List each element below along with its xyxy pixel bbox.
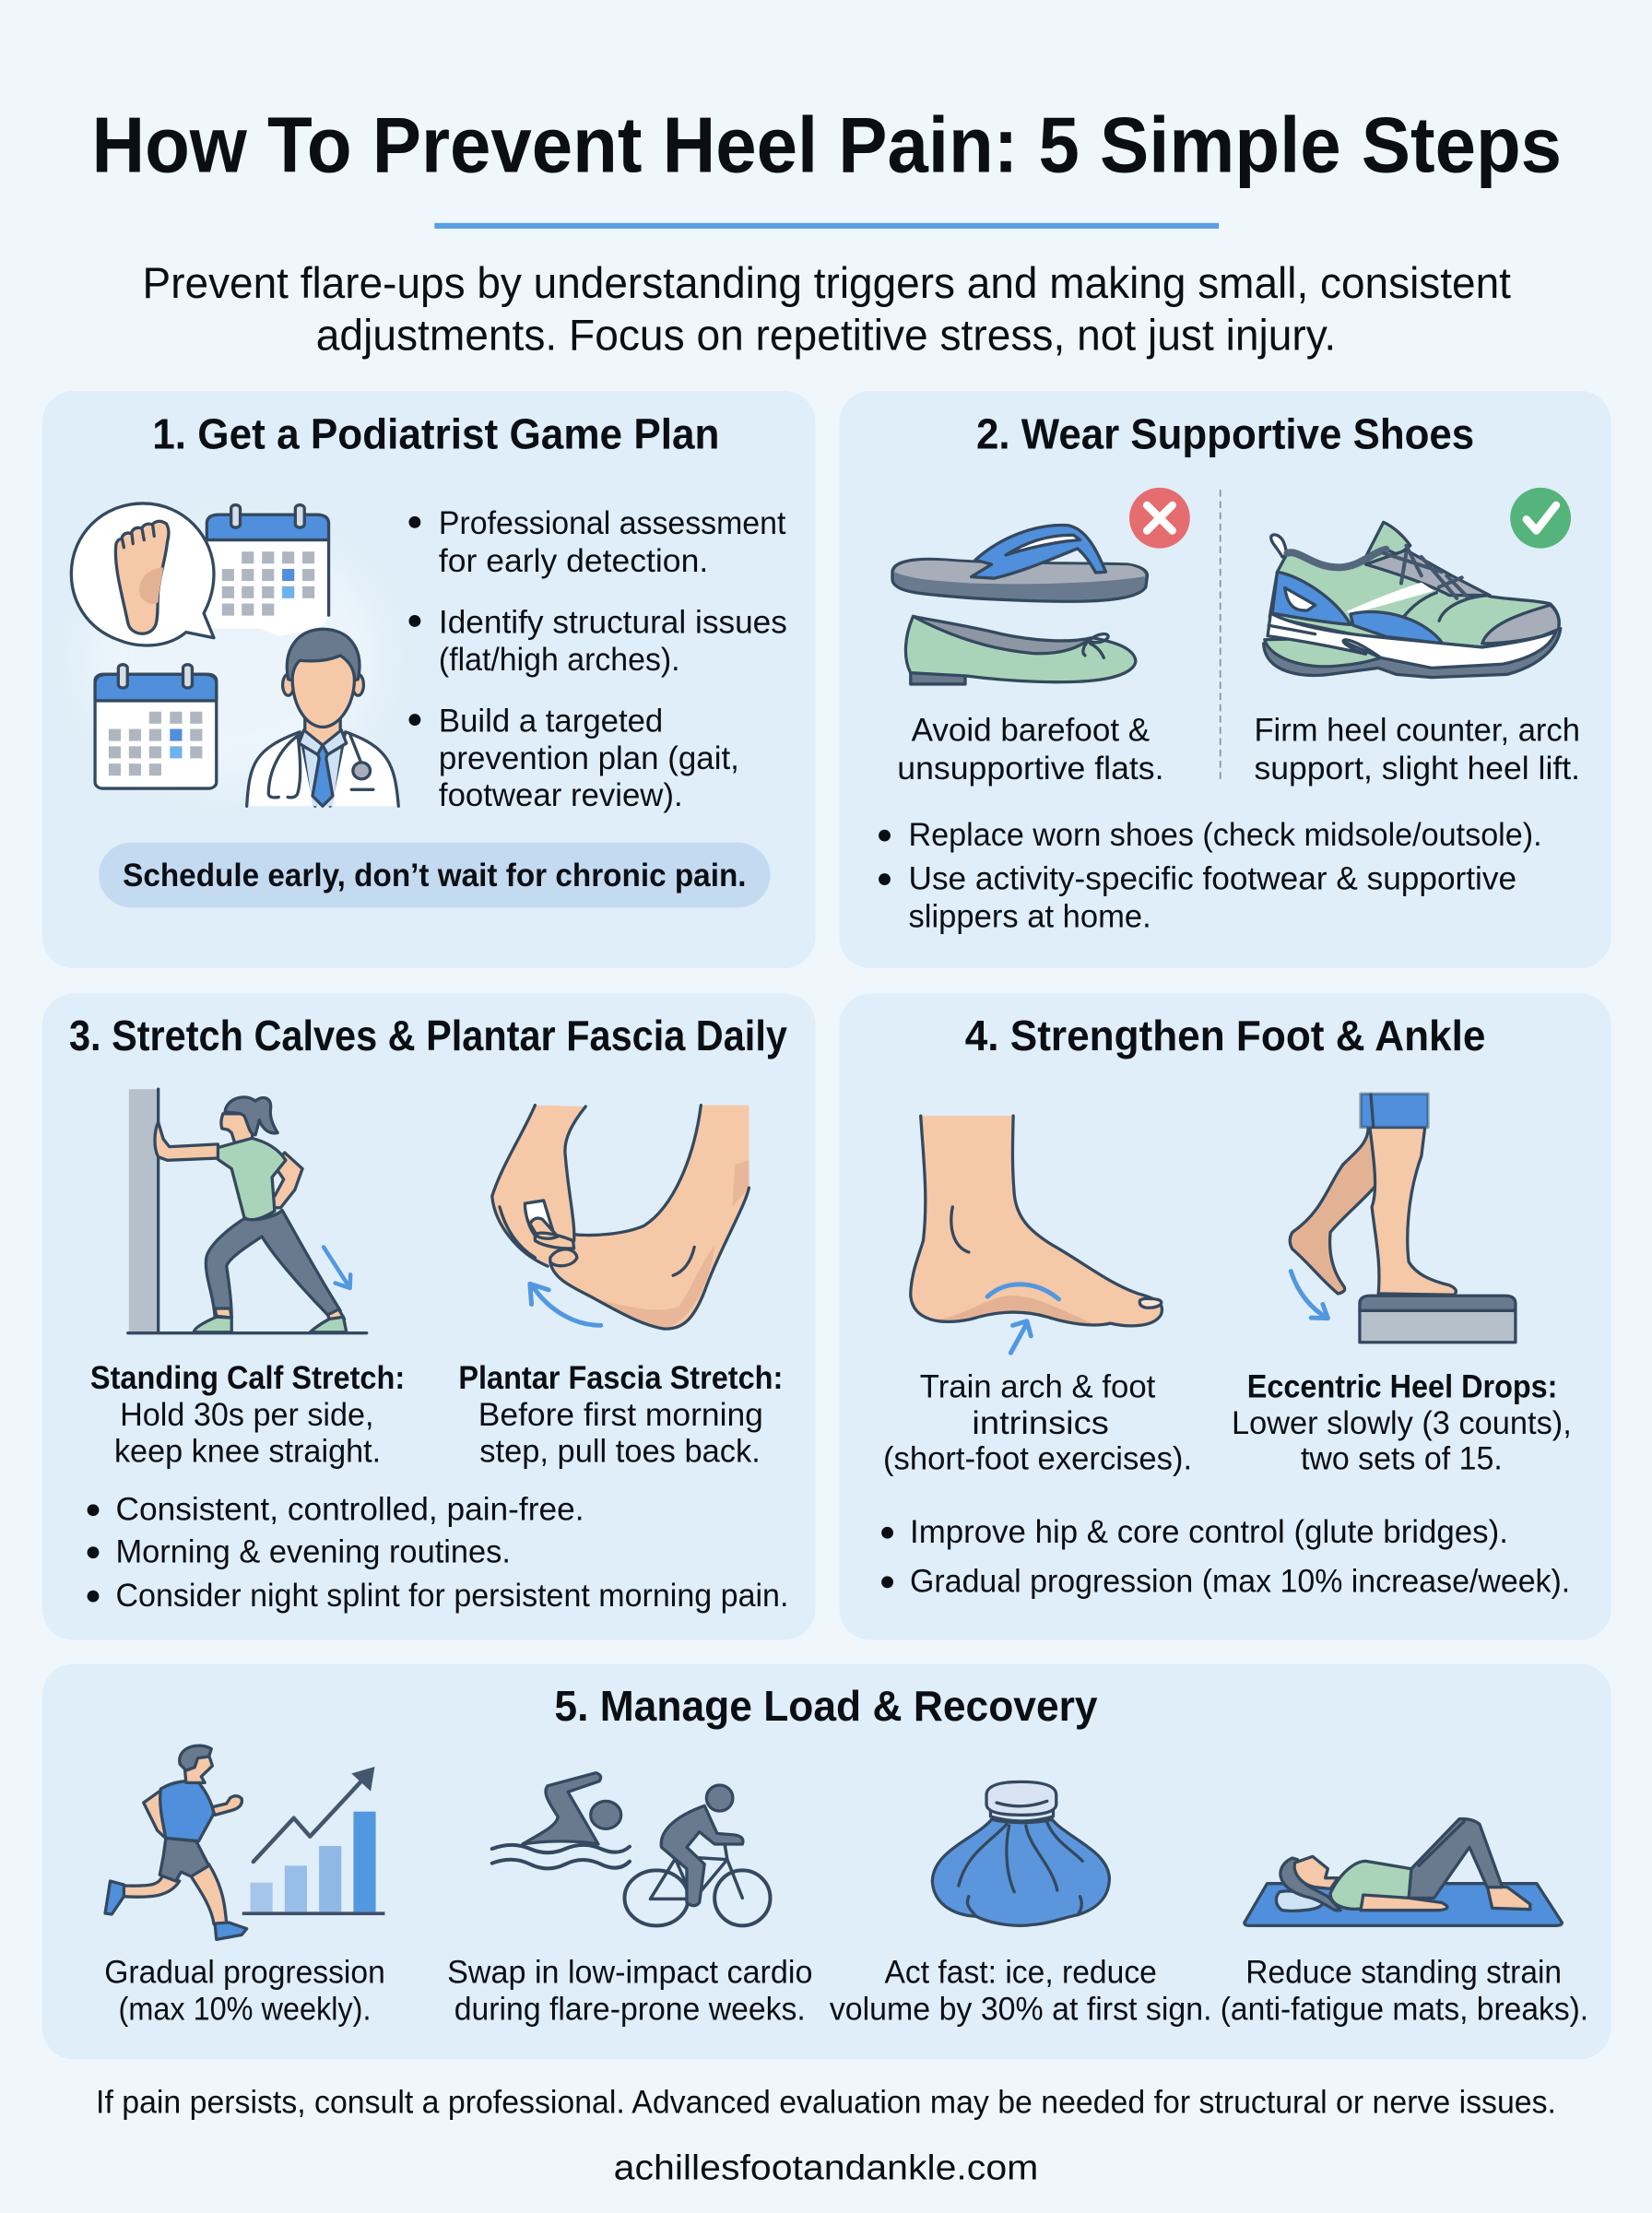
subtitle: [143, 259, 1511, 361]
caption: eccentric heel drops: Lower slowly (3 counts),: [1232, 1405, 1572, 1441]
bullet list: panel 3: Morning & evening routines.: [115, 1533, 511, 1569]
panel: 2. Wear Supportive Shoes: [840, 391, 1611, 968]
bullet list: panel 1: Professional assessment: [439, 505, 786, 541]
panel: 5. Manage Load & Recovery: [42, 1664, 1611, 2059]
icon: flip-flop: [892, 525, 1148, 601]
caption: reduce standing strain: Reduce standing strain: [1245, 1955, 1562, 1991]
bullet list: panel 1: for early detection.: [439, 543, 708, 579]
heading: panel 4: 4. Strengthen Foot & Ankle: [965, 1012, 1485, 1059]
bullet list: panel 1: footwear review).: [439, 777, 683, 813]
caption: plantar fascia stretch: Before first morning: [478, 1397, 763, 1433]
caption: low-impact cardio: Swap in low-impact cardio: [447, 1955, 812, 1991]
callout: schedule early: Schedule early, don’t wait for chronic pain.: [123, 858, 747, 893]
bullet list: panel 4: Improve hip & core control (glute bridges).: [910, 1514, 1508, 1550]
icon: ballet flat: [905, 616, 1136, 684]
subtitle: adjustments. Focus on repetitive stress, not just injury.: [316, 312, 1336, 361]
footer website: achillesfootandankle.com: [614, 2148, 1038, 2187]
caption: act fast: volume by 30% at first sign.: [830, 1991, 1212, 2027]
bullet list: panel 4: Gradual progression (max 10% increase/week).: [910, 1564, 1570, 1600]
heading: panel 3: 3. Stretch Calves & Plantar Fascia Daily: [69, 1012, 787, 1059]
bullet list: panel 1: [408, 505, 787, 813]
footer note: If pain persists, consult a professional. Advanced evaluation may be needed for structural or nerve issues.: [96, 2084, 1556, 2120]
caption: reduce standing strain: [1221, 1955, 1588, 2027]
title: How To Prevent Heel Pain: 5 Simple Steps: [91, 101, 1562, 190]
caption: standing calf stretch: Standing Calf Stretch:: [90, 1360, 405, 1396]
icon: lower calendar: [95, 665, 217, 788]
caption: standing calf stretch: Hold 30s per side,: [120, 1397, 374, 1433]
caption: low-impact cardio: [447, 1955, 812, 2027]
subtitle: Prevent flare-ups by understanding triggers and making small, consistent: [143, 259, 1511, 308]
panel: 3. Stretch Calves & Plantar Fascia Daily: [42, 994, 816, 1640]
caption: standing calf stretch: [90, 1360, 405, 1470]
bullet list: panel 2: slippers at home.: [909, 899, 1151, 935]
icon: unsupportive footwear: [892, 525, 1148, 684]
caption: low-impact cardio: during flare-prone weeks.: [454, 1991, 806, 2027]
caption: gradual progression: (max 10% weekly).: [119, 1991, 371, 2027]
caption: act fast: [830, 1955, 1212, 2027]
caption: gradual progression: Gradual progression: [104, 1955, 385, 1991]
caption: avoid barefoot: unsupportive flats.: [897, 751, 1164, 787]
caption: firm heel counter: support, slight heel lift.: [1254, 751, 1580, 787]
icon: plantar fascia stretch: [492, 1106, 749, 1329]
caption: avoid barefoot: [897, 713, 1164, 787]
panel: 4. Strengthen Foot & Ankle: [840, 994, 1611, 1640]
icon: standing calf stretch: [128, 1089, 367, 1333]
panel: 1. Get a Podiatrist Game Plan: [42, 391, 816, 968]
bullet list: panel 1: Build a targeted: [439, 703, 663, 739]
caption: standing calf stretch: keep knee straight.: [114, 1434, 381, 1470]
bullet list: panel 1: Identify structural issues: [439, 604, 787, 640]
icon: upper calendar: [206, 505, 329, 636]
caption: plantar fascia stretch: Plantar Fascia Stretch:: [458, 1360, 783, 1396]
icon: runner with rising chart: [105, 1746, 384, 1939]
callout: schedule early: [99, 843, 771, 907]
heading: panel 1: 1. Get a Podiatrist Game Plan: [152, 410, 719, 458]
icon: foot arch training: [911, 1116, 1162, 1353]
bullet list: panel 3: Consistent, controlled, pain-free.: [115, 1491, 584, 1527]
caption: train arch: Train arch & foot: [920, 1368, 1156, 1404]
icon: eccentric heel drops: [1290, 1094, 1516, 1343]
caption: reduce standing strain: (anti-fatigue mats, breaks).: [1221, 1991, 1588, 2027]
icon: swimmer and cyclist: [492, 1773, 770, 1925]
icon: red cross badge: [1129, 488, 1190, 549]
icon: ice pack: [932, 1781, 1109, 1925]
bullet list: panel 1: prevention plan (gait,: [439, 740, 739, 776]
bullet list: panel 1: (flat/high arches).: [439, 642, 680, 678]
caption: firm heel counter: Firm heel counter, arch: [1254, 713, 1580, 749]
caption: plantar fascia stretch: [458, 1360, 783, 1470]
caption: train arch: (short-foot exercises).: [883, 1440, 1192, 1476]
caption: gradual progression: [104, 1955, 385, 2027]
caption: act fast: Act fast: ice, reduce: [885, 1955, 1157, 1991]
caption: avoid barefoot: Avoid barefoot &: [912, 713, 1150, 749]
caption: eccentric heel drops: two sets of 15.: [1301, 1440, 1503, 1476]
caption: train arch: intrinsics: [972, 1405, 1109, 1441]
caption: eccentric heel drops: [1232, 1368, 1572, 1476]
icon: supportive running shoe: [1264, 522, 1561, 678]
icon: person resting on mat: [1245, 1819, 1562, 1925]
caption: eccentric heel drops: Eccentric Heel Drops:: [1247, 1368, 1557, 1404]
bullet list: panel 3: [88, 1491, 788, 1614]
bullet list: panel 3: Consider night splint for persistent morning pain.: [115, 1578, 788, 1614]
icon: doctor: [247, 629, 398, 806]
heading: panel 5: 5. Manage Load & Recovery: [554, 1682, 1098, 1730]
bullet list: panel 2: Replace worn shoes (check midsole/outsole).: [909, 817, 1542, 853]
bullet list: panel 4: [881, 1514, 1570, 1600]
heading: panel 2: 2. Wear Supportive Shoes: [976, 410, 1474, 458]
bullet list: panel 2: [879, 817, 1542, 935]
icon: podiatrist with calendars and foot: [71, 503, 398, 806]
icon: foot in speech bubble: [71, 503, 214, 645]
icon: green check badge: [1510, 488, 1571, 549]
caption: plantar fascia stretch: step, pull toes back.: [479, 1434, 761, 1470]
caption: train arch: [883, 1368, 1192, 1476]
caption: firm heel counter: [1254, 713, 1580, 787]
bullet list: panel 2: Use activity-specific footwear & supportive: [909, 860, 1516, 896]
